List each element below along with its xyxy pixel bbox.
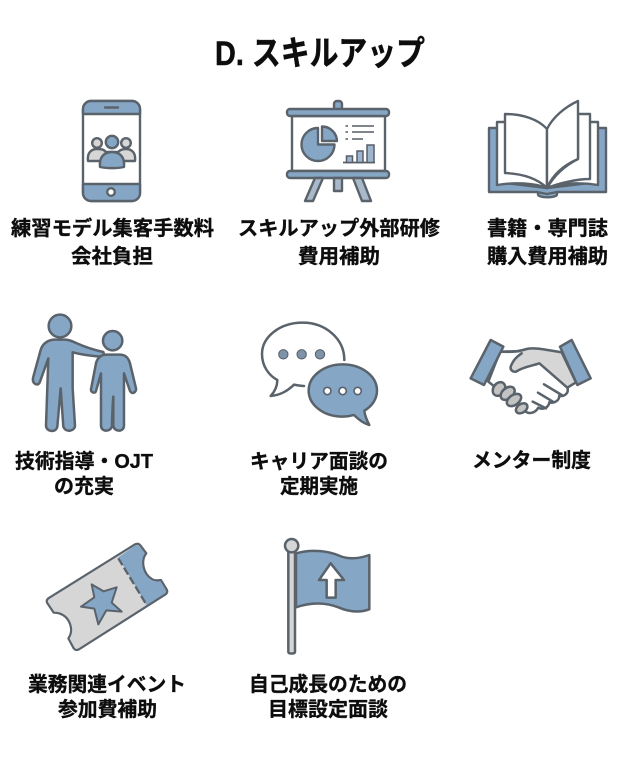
icon: ticket with star — [47, 544, 167, 650]
label: mentor system: メンター制度 — [472, 449, 591, 472]
label: practice model fee: 練習モデル集客手数料 — [11, 216, 214, 240]
label: event participation fee: 業務関連イベント — [28, 672, 186, 696]
label: self-growth goal interview — [249, 672, 407, 721]
label: books and journals — [487, 217, 608, 268]
icon: flag with up arrow — [285, 539, 369, 653]
label: external training — [238, 217, 440, 268]
label: career interviews — [250, 450, 388, 498]
label: self-growth goal interview: 自己成長のための — [249, 672, 407, 696]
label: self-growth goal interview: 目標設定面談 — [268, 698, 388, 721]
label: practice model fee — [11, 216, 214, 268]
icon: adult and child — [33, 315, 136, 431]
label: books and journals: 購入費用補助 — [487, 245, 608, 268]
label: event participation fee — [28, 672, 186, 721]
label: event participation fee: 参加費補助 — [58, 698, 157, 721]
label: practice model fee: 会社負担 — [71, 245, 153, 268]
label: external training: 費用補助 — [298, 245, 380, 268]
icon: handshake — [471, 340, 591, 416]
icon: smartphone with group — [83, 101, 140, 201]
label: external training: スキルアップ外部研修 — [238, 217, 440, 240]
title: D. スキルアップ — [215, 35, 425, 73]
label: technical guidance OJT: の充実 — [54, 475, 114, 498]
label: career interviews: キャリア面談の — [250, 450, 388, 473]
label: books and journals: 書籍・専門誌 — [487, 217, 608, 240]
icon: speech bubbles — [262, 323, 377, 425]
icon: presentation board — [287, 101, 389, 201]
icon: open book — [489, 101, 606, 197]
label: career interviews: 定期実施 — [280, 475, 358, 498]
label: technical guidance OJT: 技術指導・OJT — [15, 449, 153, 473]
label: technical guidance OJT — [15, 449, 153, 498]
